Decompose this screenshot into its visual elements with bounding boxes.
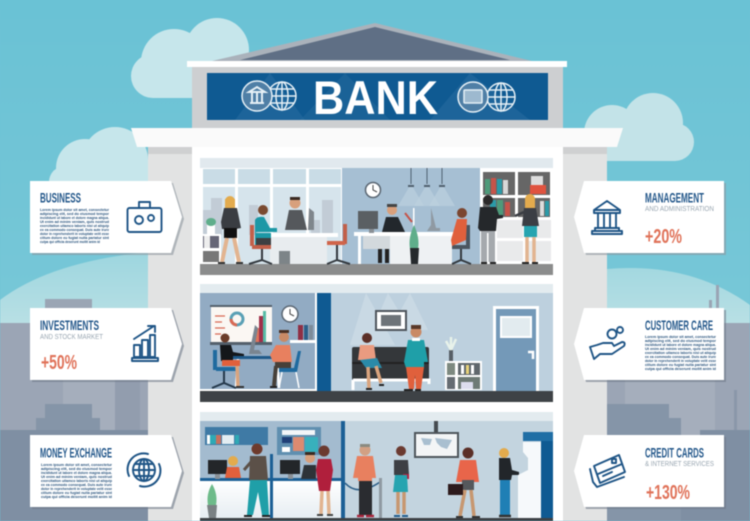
body text: cillum dolore eu fugiat nulla pariatur sint xyxy=(41,490,113,495)
card: money exchange xyxy=(30,435,184,509)
blue pillar xyxy=(317,293,331,391)
percentage: +50% xyxy=(41,352,77,374)
queue post xyxy=(341,421,345,518)
body text: cillum dolore eu fugiat nulla pariatur sint xyxy=(40,235,110,240)
monitor xyxy=(308,208,314,230)
body text: incididunt ut labore et dolore magna aliqua. xyxy=(41,470,112,475)
body text: adipiscing elit, sed do eiusmod tempor xyxy=(40,211,109,216)
woman seated, black top xyxy=(212,334,244,388)
icon: card and globe xyxy=(458,82,515,112)
heading: MONEY EXCHANGE xyxy=(40,444,112,460)
card: investments xyxy=(30,308,184,382)
body text: dolor in reprehenderit in voluptate velit esse xyxy=(40,231,110,236)
body text: incididunt ut labore et dolore magna aliqua. xyxy=(40,215,109,220)
man on sofa xyxy=(404,325,428,390)
plant in vase xyxy=(446,337,456,362)
card: customer care xyxy=(574,308,726,382)
body text xyxy=(645,334,717,371)
cornice xyxy=(131,128,623,147)
body text: adipiscing elit, sed do eiusmod tempor xyxy=(645,338,716,343)
bookshelf xyxy=(205,427,268,445)
icon: bank building xyxy=(592,201,622,234)
body text: Lorem ipsum dolor sit amet, consectetur xyxy=(645,334,716,339)
heading: BUSINESS xyxy=(40,190,81,206)
low cabinet xyxy=(445,361,482,390)
thin monitor xyxy=(427,208,440,231)
man at desk xyxy=(382,204,412,232)
icon: bank and globe xyxy=(242,81,296,111)
body text: exercitation ullamco laboris nisi ut aliquip xyxy=(40,223,110,228)
customer man xyxy=(244,444,270,516)
desk 1 xyxy=(262,233,338,264)
heading: INVESTMENTS xyxy=(40,317,99,333)
teller man xyxy=(301,452,316,479)
floor 3: counter and queue xyxy=(200,412,553,521)
windows xyxy=(203,169,341,265)
ATM xyxy=(518,432,553,518)
icon: rotating globe xyxy=(128,453,160,487)
cabinet and plant xyxy=(201,218,221,264)
heading: MANAGEMENT xyxy=(645,190,704,206)
woman walking xyxy=(218,196,243,263)
body text xyxy=(40,207,110,244)
body text: Ut enim ad minim veniam, quis nostrud xyxy=(41,474,113,479)
woman seated, orange xyxy=(451,208,471,264)
floor 2: meeting room and lobby xyxy=(200,284,553,402)
man at ATM xyxy=(499,448,519,516)
body text: dolor in reprehenderit in voluptate velit esse xyxy=(41,486,113,491)
red chair xyxy=(327,224,350,264)
man seated, orange xyxy=(270,330,301,388)
cloud: lower left xyxy=(49,127,150,220)
man seated, teal xyxy=(249,205,277,264)
woman by shelf xyxy=(515,194,539,263)
card: business xyxy=(30,181,184,255)
info board xyxy=(277,427,321,455)
cloud: right xyxy=(584,93,694,161)
body text: ex ea commodo consequat. Duis aute irure xyxy=(40,227,110,232)
icon: credit cards xyxy=(590,455,625,487)
body text: cillum dolore eu fugiat nulla pariatur sint xyxy=(645,362,717,367)
counter rail xyxy=(200,478,345,481)
body text: Lorem ipsum dolor sit amet, consectetur xyxy=(40,207,109,212)
body text: Ut enim ad minim veniam, quis nostrud xyxy=(40,219,110,224)
card: management xyxy=(574,181,726,255)
body text: adipiscing elit, sed do eiusmod tempor xyxy=(41,466,112,471)
body text: Ut enim ad minim veniam, quis nostrud xyxy=(645,346,717,351)
body text: culpa qui officia deserunt mollit anim id xyxy=(40,239,100,244)
icon: growth chart xyxy=(132,326,158,361)
queue rope xyxy=(345,482,380,490)
card: credit cards xyxy=(574,435,726,509)
subheading: AND STOCK MARKET xyxy=(40,334,104,341)
body text: dolor in reprehenderit in voluptate velit esse xyxy=(645,358,717,363)
wall picture xyxy=(375,310,407,331)
body text: ex ea commodo consequat. Duis aute irure xyxy=(41,482,113,487)
shelving unit xyxy=(480,168,553,265)
body text: culpa qui officia deserunt mollit anim id xyxy=(645,366,717,371)
presentation board xyxy=(210,305,272,345)
cloud: upper left xyxy=(131,18,249,98)
subheading: AND ADMINISTRATION xyxy=(645,206,714,213)
roof xyxy=(212,23,532,61)
clock xyxy=(282,306,298,322)
man standing, gray suit xyxy=(285,197,307,230)
bank sign xyxy=(207,71,548,124)
dark monitor xyxy=(358,211,378,233)
body text: ex ea commodo consequat. Duis aute irure xyxy=(645,354,717,359)
blue post xyxy=(270,454,273,518)
potted plant xyxy=(207,484,217,518)
body text: culpa qui officia deserunt mollit anim id xyxy=(41,494,113,499)
clock xyxy=(366,182,380,198)
body text: exercitation ullamco laboris nisi ut aliquip xyxy=(645,350,717,355)
teller monitors xyxy=(208,460,300,479)
ceiling light cones xyxy=(350,293,428,345)
floor 1: offices xyxy=(200,158,553,275)
woman on sofa xyxy=(358,333,384,389)
percentage: +130% xyxy=(646,482,690,504)
woman in queue, teal skirt xyxy=(393,446,409,516)
body text xyxy=(41,462,113,499)
teller woman xyxy=(225,456,241,478)
plant xyxy=(410,208,419,264)
body text: exercitation ullamco laboris nisi ut aliquip xyxy=(41,478,113,483)
sofa xyxy=(352,347,429,390)
desk 2 xyxy=(354,232,460,264)
man in queue xyxy=(353,444,376,516)
pendant lamps xyxy=(398,168,455,206)
books on shelf xyxy=(290,325,315,343)
subheading: & INTERNET SERVICES xyxy=(645,461,714,468)
body text: Lorem ipsum dolor sit amet, consectetur xyxy=(41,462,112,467)
icon: hand with coins xyxy=(590,327,625,359)
woman with briefcase xyxy=(448,448,480,517)
skyline: right xyxy=(607,285,750,521)
stanchion xyxy=(379,478,382,518)
building xyxy=(131,23,623,521)
door xyxy=(493,306,539,391)
wall screen xyxy=(414,421,459,458)
body text: incididunt ut labore et dolore magna aliqua. xyxy=(645,342,716,347)
skyline: left xyxy=(0,299,148,521)
meeting table xyxy=(233,325,282,388)
icon: briefcase with gears xyxy=(128,202,162,232)
bank name: BANK xyxy=(313,71,438,124)
man by shelf xyxy=(478,195,503,263)
heading: CREDIT CARDS xyxy=(645,444,704,460)
woman in red dress xyxy=(316,446,333,515)
percentage: +20% xyxy=(645,226,682,248)
